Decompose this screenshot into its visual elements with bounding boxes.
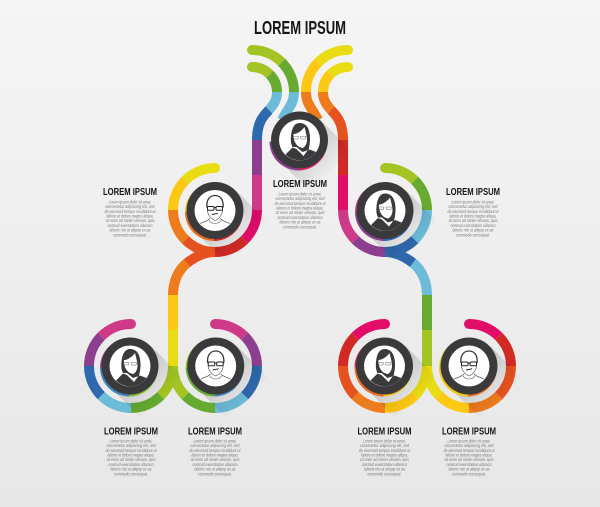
connector: top left branches — [247, 45, 294, 210]
text block: bottom second: laboris nisi ut aliquip ex ea — [194, 467, 236, 472]
text block: bottom fourth — [442, 426, 496, 476]
ring: bottom third — [343, 319, 427, 408]
text block: bottom first: laboris nisi ut aliquip ex ea — [110, 467, 152, 472]
text block: bottom first: commodo consequat. — [114, 471, 148, 476]
avatar: bottom fourth man — [439, 338, 521, 418]
text block: bottom third: LOREM IPSUM — [358, 426, 412, 438]
text block: second level left: laboris nisi ut aliquip ex ea — [110, 228, 151, 233]
ring: bottom second — [173, 319, 257, 408]
text block: bottom second: commodo consequat. — [198, 471, 232, 476]
ring: bottom fourth — [427, 319, 511, 408]
text block: bottom third: commodo consequat. — [368, 471, 402, 476]
text block: bottom second: Ut enim ad minim veniam, quis — [190, 457, 240, 462]
text block: second level left: nostrud exercitation ullamco — [108, 223, 153, 228]
text block: second level left: Lorem ipsum dolor sit amet, — [108, 199, 152, 204]
avatar: second level left man — [185, 182, 267, 262]
text block: top center: consectetur adipiscing elit, sed — [276, 196, 325, 201]
text block: top center: nostrud exercitation ullamco — [278, 215, 323, 220]
text block: second level right: nostrud exercitation ullamco — [450, 223, 496, 228]
text block: bottom fourth: consectetur adipiscing elit, sed — [444, 443, 494, 448]
text block: bottom first: LOREM IPSUM — [104, 426, 158, 438]
text block: second level right: LOREM IPSUM — [446, 186, 500, 198]
text block: bottom second: nostrud exercitation ullamco — [192, 462, 238, 467]
text block: bottom second: LOREM IPSUM — [188, 426, 242, 438]
text block: second level left: labore et dolore magna aliqua. — [106, 213, 154, 218]
avatar: second level right woman — [355, 182, 437, 262]
ring: second level left — [173, 163, 257, 366]
text block: top center: Lorem ipsum dolor sit amet, — [278, 191, 322, 196]
text block: top center: laboris nisi ut aliquip ex ea — [280, 220, 321, 225]
text block: bottom fourth: nostrud exercitation ullamco — [446, 462, 492, 467]
avatar: bottom third woman — [354, 338, 436, 418]
text block: bottom second: labore et dolore magna aliqua. — [192, 452, 238, 457]
avatar: top woman — [270, 112, 352, 192]
text block: bottom first: labore et dolore magna aliqua. — [108, 452, 154, 457]
text block: bottom fourth: labore et dolore magna aliqua. — [446, 452, 492, 457]
text block: bottom first: consectetur adipiscing elit, sed — [106, 443, 156, 448]
avatar: bottom second man — [186, 338, 268, 418]
text block: second level right: do eiusmod tempor incididunt ut — [448, 209, 499, 214]
text block: bottom fourth: LOREM IPSUM — [442, 426, 496, 438]
text block: bottom second — [188, 426, 242, 476]
text block: top center — [273, 178, 327, 229]
text block: bottom fourth: Ut enim ad minim veniam, quis — [444, 457, 494, 462]
text block: bottom fourth: do eiusmod tempor incididunt ut — [444, 448, 495, 453]
connector: top right branches — [306, 45, 353, 210]
text block: bottom first: Lorem ipsum dolor sit amet, — [110, 438, 152, 443]
text block: bottom third: consectetur adipiscing elit, sed — [360, 443, 410, 448]
ring: second level right — [343, 163, 427, 366]
text block: bottom fourth: laboris nisi ut aliquip ex ea — [448, 467, 490, 472]
text block: bottom third: Ut enim ad minim veniam, quis — [360, 457, 410, 462]
text block: bottom third: labore et dolore magna aliqua. — [361, 452, 408, 457]
text block: second level left: consectetur adipiscing elit, sed — [106, 204, 155, 209]
text block: bottom third: do eiusmod tempor incididunt ut — [359, 448, 411, 453]
text block: second level right: Lorem ipsum dolor sit amet, — [452, 199, 494, 204]
text block: bottom second: do eiusmod tempor incididunt ut — [190, 448, 241, 453]
text block: bottom third: Lorem ipsum dolor sit amet, — [363, 438, 406, 443]
text block: bottom first: nostrud exercitation ullamco — [108, 462, 154, 467]
text block: second level left: LOREM IPSUM — [103, 186, 157, 198]
text block: top center: commodo consequat. — [283, 224, 317, 229]
avatar: bottom first woman — [100, 338, 182, 418]
text block: top center: labore et dolore magna aliqua. — [276, 205, 324, 210]
text block: bottom fourth: Lorem ipsum dolor sit amet, — [448, 438, 490, 443]
text block: second level left: do eiusmod tempor incididunt ut — [104, 209, 156, 214]
text block: second level right: commodo consequat. — [456, 232, 490, 237]
text block: bottom fourth: commodo consequat. — [452, 471, 486, 476]
text block: top center: Ut enim ad minim veniam, quis — [276, 210, 325, 215]
text block: top center: do eiusmod tempor incididunt ut — [274, 201, 326, 206]
text block: bottom third: laboris nisi ut aliquip ex ea — [364, 467, 406, 472]
text block: bottom third — [358, 426, 412, 476]
ring: bottom first — [89, 319, 173, 408]
text block: second level right: consectetur adipiscing elit, sed — [448, 204, 498, 209]
text block: bottom first: Ut enim ad minim veniam, quis — [106, 457, 156, 462]
text block: bottom third: nostrud exercitation ullamco — [362, 462, 408, 467]
text block: second level right: labore et dolore magna aliqua. — [450, 213, 496, 218]
text block: second level left — [103, 186, 157, 237]
text block: bottom second: Lorem ipsum dolor sit amet, — [194, 438, 236, 443]
text block: top center: LOREM IPSUM — [273, 178, 327, 190]
text block: bottom first: do eiusmod tempor incididunt ut — [106, 448, 157, 453]
text block: second level left: Ut enim ad minim veniam, quis — [106, 218, 155, 223]
title: LOREM IPSUM — [254, 18, 346, 38]
text block: second level right: laboris nisi ut aliquip ex ea — [452, 228, 494, 233]
text block: bottom first — [104, 426, 158, 476]
text block: second level left: commodo consequat. — [113, 232, 147, 237]
text block: second level right: Ut enim ad minim veniam, quis — [448, 218, 498, 223]
text block: bottom second: consectetur adipiscing elit, sed — [190, 443, 240, 448]
text block: second level right — [446, 186, 500, 237]
